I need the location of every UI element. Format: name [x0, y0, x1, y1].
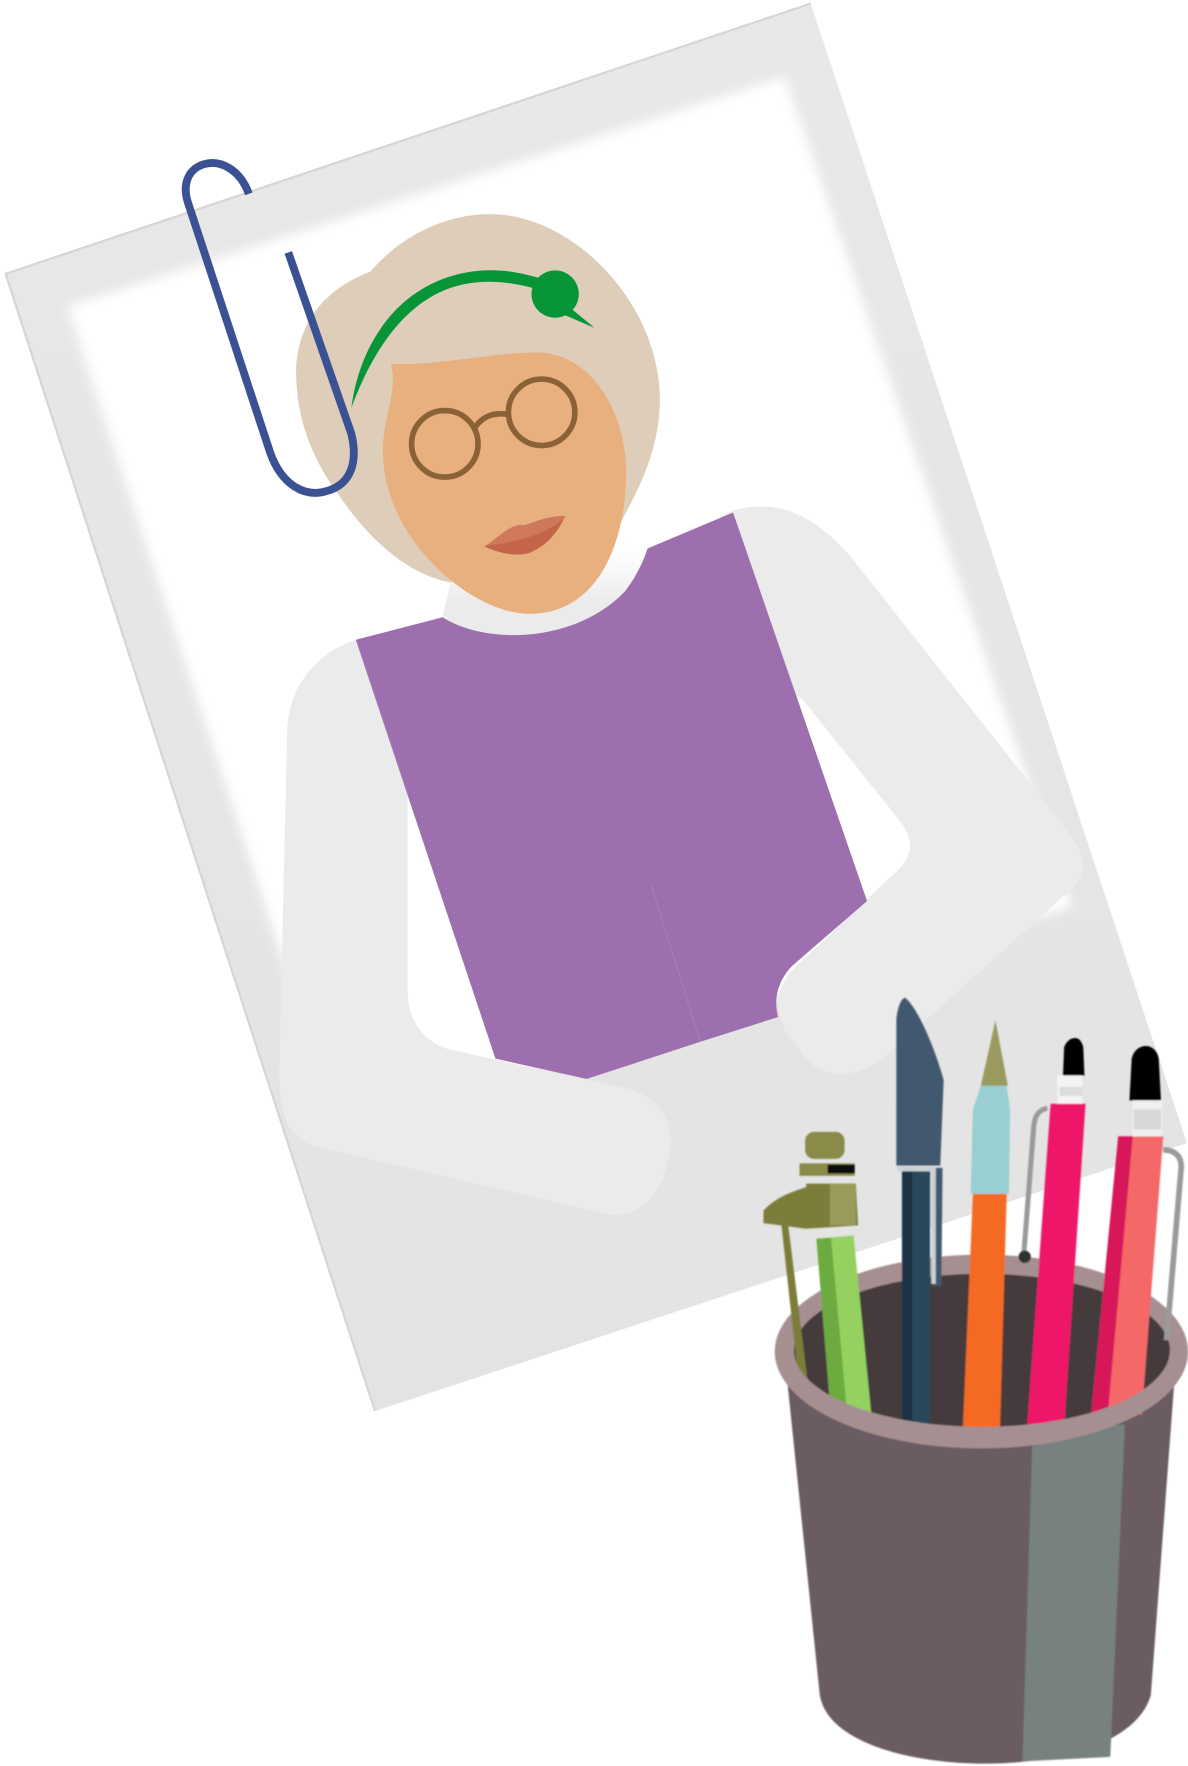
- face: [383, 353, 626, 614]
- book spine: [651, 884, 700, 1042]
- pen: orange with teal grip: [963, 1020, 1010, 1430]
- panel: tilted paper sheet: [6, 4, 1187, 1411]
- cup body: [787, 1380, 1174, 1764]
- pen: magenta with clip: [1019, 1038, 1086, 1428]
- cup highlight stripe: [1022, 1425, 1125, 1761]
- cup interior: [794, 1274, 1170, 1427]
- icon: blue paperclip: [186, 163, 354, 493]
- cup front rim: [775, 1350, 1188, 1448]
- pen: green with olive cap: [763, 1132, 872, 1417]
- cup rim: [775, 1255, 1188, 1448]
- hair: [296, 214, 660, 582]
- headband: [351, 270, 595, 408]
- figure: woman reading a book: [279, 214, 1083, 1215]
- lips: [484, 516, 565, 555]
- collar: [443, 541, 647, 635]
- pen: coral with clip: [1091, 1046, 1181, 1415]
- glasses: [412, 379, 575, 477]
- right arm: [721, 506, 1083, 1074]
- open book: [356, 513, 867, 1079]
- left arm: [279, 640, 670, 1215]
- pen: navy with cap and clip: [896, 998, 944, 1426]
- icon: pen cup with pens: [763, 998, 1188, 1764]
